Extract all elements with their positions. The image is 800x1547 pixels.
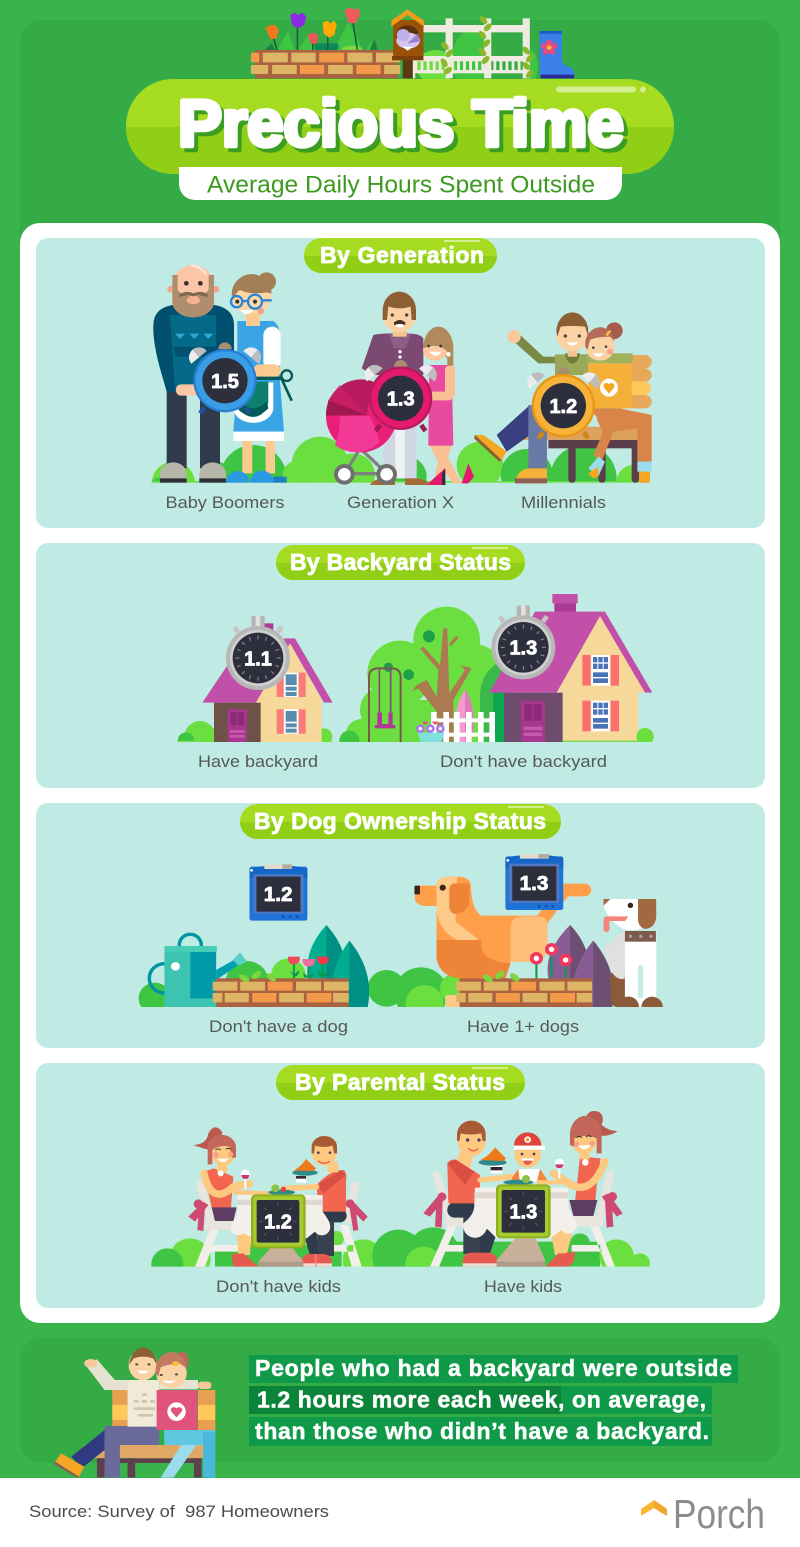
- heading: by parental status: [276, 1065, 525, 1100]
- millennial man: [474, 312, 588, 483]
- callout panel: [20, 1338, 780, 1463]
- label: don't have a dog: Don't have a dog: [209, 1017, 348, 1036]
- heading: by dog ownership status: [240, 804, 561, 839]
- panel: by backyard status: [36, 543, 765, 788]
- illustration: generations: [152, 264, 652, 485]
- panel: by dog ownership: [36, 803, 765, 1048]
- flowers: [288, 957, 329, 978]
- tablet 1.3: 1.3: [520, 873, 548, 895]
- illustration: couple on bench: [54, 1347, 215, 1478]
- generation x woman: [423, 327, 474, 485]
- porch logo: Porch: [673, 1491, 765, 1537]
- label: have kids: Have kids: [484, 1277, 562, 1296]
- left bushes: [138, 958, 460, 1007]
- heading: by dog ownership status: By Dog Ownership Status: [254, 808, 546, 834]
- yard trees and swing: [339, 607, 510, 751]
- man right: [287, 1136, 347, 1267]
- bench: [84, 1390, 215, 1478]
- planter left: [213, 969, 349, 1007]
- baby boomer woman: [226, 272, 292, 483]
- title shadow: Precious Time: [182, 90, 628, 164]
- title: Precious Time: [178, 86, 624, 160]
- label: don't have kids: Don't have kids: [216, 1277, 341, 1296]
- white content panel: [20, 223, 780, 1323]
- couple table chairs: [188, 1185, 368, 1267]
- panel: by parental status: [36, 1063, 765, 1308]
- clock 1.3: [361, 360, 441, 432]
- tablet lime 1.3: 1.3: [509, 1201, 537, 1223]
- woman: [155, 1352, 215, 1478]
- heading: by parental status: By Parental Status: [295, 1069, 505, 1095]
- white dog: [604, 899, 663, 1007]
- callout text: than those who didn’t have a backyard.: [255, 1418, 709, 1444]
- heading: by backyard status: By Backyard Status: [290, 549, 511, 575]
- stopwatch 1.1: 1.1: [244, 648, 272, 670]
- bushes: [151, 1227, 650, 1267]
- brick planter: [251, 50, 400, 78]
- baby boomer man: [153, 265, 234, 483]
- footer: [0, 1478, 800, 1547]
- generation x man: [362, 292, 430, 485]
- small house: [178, 623, 333, 752]
- garden decoration: [251, 7, 574, 90]
- source: Source: Survey of 987 Homeowners: [29, 1502, 329, 1521]
- clock 1.2: [523, 367, 603, 440]
- large house: [489, 594, 654, 745]
- birdhouse: [391, 9, 424, 78]
- title banner: [126, 79, 674, 174]
- clock 1.2: 1.2: [549, 396, 577, 418]
- label: have backyard: Have backyard: [198, 752, 318, 771]
- teal leaves: [308, 925, 369, 1007]
- couple table: [230, 1184, 330, 1267]
- family father: [447, 1121, 512, 1267]
- label: have 1+ dogs: Have 1+ dogs: [467, 1017, 579, 1036]
- family child: [512, 1132, 548, 1182]
- panel: by generation: [36, 238, 765, 528]
- family table chairs: [423, 1175, 623, 1267]
- bench: [523, 355, 652, 483]
- red flowers: [530, 943, 572, 978]
- callout text: 1.2 hours more each week, on average,: [257, 1386, 706, 1412]
- man: [54, 1347, 211, 1478]
- heading: by generation: [304, 238, 497, 273]
- heading: by backyard status: [276, 545, 525, 580]
- tablet 1.2: 1.2: [264, 884, 292, 906]
- illustration: backyards: [178, 594, 654, 752]
- label: millennials: Millennials: [521, 493, 606, 512]
- clock 1.3: 1.3: [387, 389, 415, 411]
- stopwatch 1.3: 1.3: [509, 638, 537, 660]
- label: generation x: Generation X: [347, 493, 454, 512]
- callout text: People who had a backyard were outside: [255, 1355, 732, 1381]
- tablet lime 1.2: 1.2: [264, 1211, 292, 1233]
- stopwatch 1.3: [491, 605, 555, 679]
- callout text: [249, 1355, 738, 1446]
- clock 1.5: [185, 342, 265, 415]
- bushes: [152, 436, 650, 483]
- planter right: [456, 969, 592, 1007]
- tablet 1.3: [505, 854, 563, 910]
- purple leaves: [548, 925, 614, 1007]
- tablet 1.2: [250, 864, 307, 921]
- woman left: [193, 1127, 268, 1267]
- header backing panel: [20, 20, 780, 320]
- porch logo: [641, 1491, 765, 1537]
- subtitle: [179, 167, 622, 200]
- planter plants: [265, 7, 378, 52]
- rain boot: [539, 31, 574, 78]
- fence: [413, 15, 538, 90]
- family table: [463, 1175, 577, 1267]
- stroller: [326, 379, 397, 485]
- tablet lime 1.3: [496, 1184, 551, 1238]
- illustration: dogs and planters: [139, 854, 663, 1022]
- subtitle: Average Daily Hours Spent Outside: [207, 172, 595, 198]
- millennial woman: [585, 322, 652, 483]
- watering can: [149, 934, 247, 1007]
- clock 1.5: 1.5: [211, 371, 239, 393]
- illustration: families at tables: [151, 1111, 650, 1283]
- golden dog: [414, 877, 585, 1007]
- label: baby boomers: Baby Boomers: [166, 493, 284, 512]
- family mother: [537, 1111, 618, 1267]
- tablet lime 1.2: [251, 1194, 306, 1248]
- label: don't have backyard: Don't have backyard: [440, 752, 607, 771]
- stopwatch 1.1: [226, 616, 290, 690]
- heading: by generation: By Generation: [320, 242, 484, 268]
